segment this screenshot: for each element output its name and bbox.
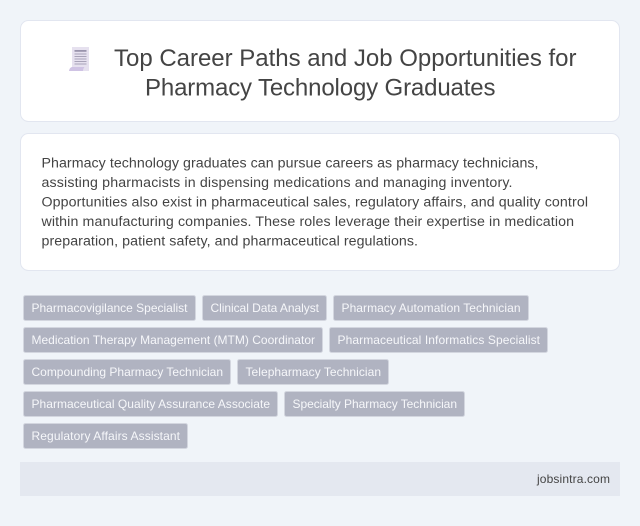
tag: Pharmacy Automation Technician	[334, 296, 528, 320]
tag: Medication Therapy Management (MTM) Coordinator	[24, 328, 322, 352]
tag: Specialty Pharmacy Technician	[284, 392, 464, 416]
title: Pharmacy Technology Graduates	[145, 74, 496, 102]
text block: description: assisting pharmacists in dispensing medications and managing inventory.	[42, 175, 512, 191]
tag: Pharmaceutical Informatics Specialist	[330, 328, 548, 352]
icon: pharmacy document	[69, 47, 89, 71]
footer	[20, 462, 620, 496]
tag: Clinical Data Analyst: Clinical Data Analyst	[210, 301, 320, 315]
tag: Pharmacy Automation Technician: Pharmacy Automation Technician	[342, 301, 520, 315]
tag: Pharmaceutical Quality Assurance Associate: Pharmaceutical Quality Assurance Associate	[32, 397, 270, 411]
text block: description: within manufacturing companies. These roles leverage their expertise in medication	[40, 214, 574, 230]
text block: description: Pharmacy technology graduates can pursue careers as pharmacy technicians,	[42, 156, 538, 172]
tag: Telepharmacy Technician	[238, 360, 388, 384]
tag: Clinical Data Analyst	[202, 296, 326, 320]
tag: Regulatory Affairs Assistant: Regulatory Affairs Assistant	[32, 429, 181, 443]
text block: description: Opportunities also exist in pharmaceutical sales, regulatory affairs, and quality control	[42, 194, 588, 210]
text block: description: preparation, patient safety, and pharmaceutical regulations.	[42, 234, 418, 250]
tag: Specialty Pharmacy Technician: Specialty Pharmacy Technician	[292, 397, 457, 411]
tag: Telepharmacy Technician: Telepharmacy Technician	[246, 365, 381, 379]
panel: description	[20, 134, 620, 270]
tag: Pharmacovigilance Specialist	[24, 296, 196, 320]
title: Top Career Paths and Job Opportunities for	[114, 45, 576, 72]
title	[114, 45, 576, 102]
text block: description	[40, 156, 588, 250]
footer source text: jobsintra.com	[536, 472, 610, 486]
tag: Pharmacovigilance Specialist: Pharmacovigilance Specialist	[32, 301, 188, 315]
tag: Medication Therapy Management (MTM) Coordinator: Medication Therapy Management (MTM) Coordinator	[32, 333, 315, 347]
tag: Compounding Pharmacy Technician: Compounding Pharmacy Technician	[32, 365, 223, 379]
tag: Pharmaceutical Quality Assurance Associate	[24, 392, 278, 416]
panel: career tags	[24, 296, 548, 448]
tag: Regulatory Affairs Assistant	[24, 424, 188, 448]
tag: Compounding Pharmacy Technician	[24, 360, 230, 384]
panel: header	[20, 20, 620, 122]
tag: Pharmaceutical Informatics Specialist: Pharmaceutical Informatics Specialist	[338, 333, 541, 347]
